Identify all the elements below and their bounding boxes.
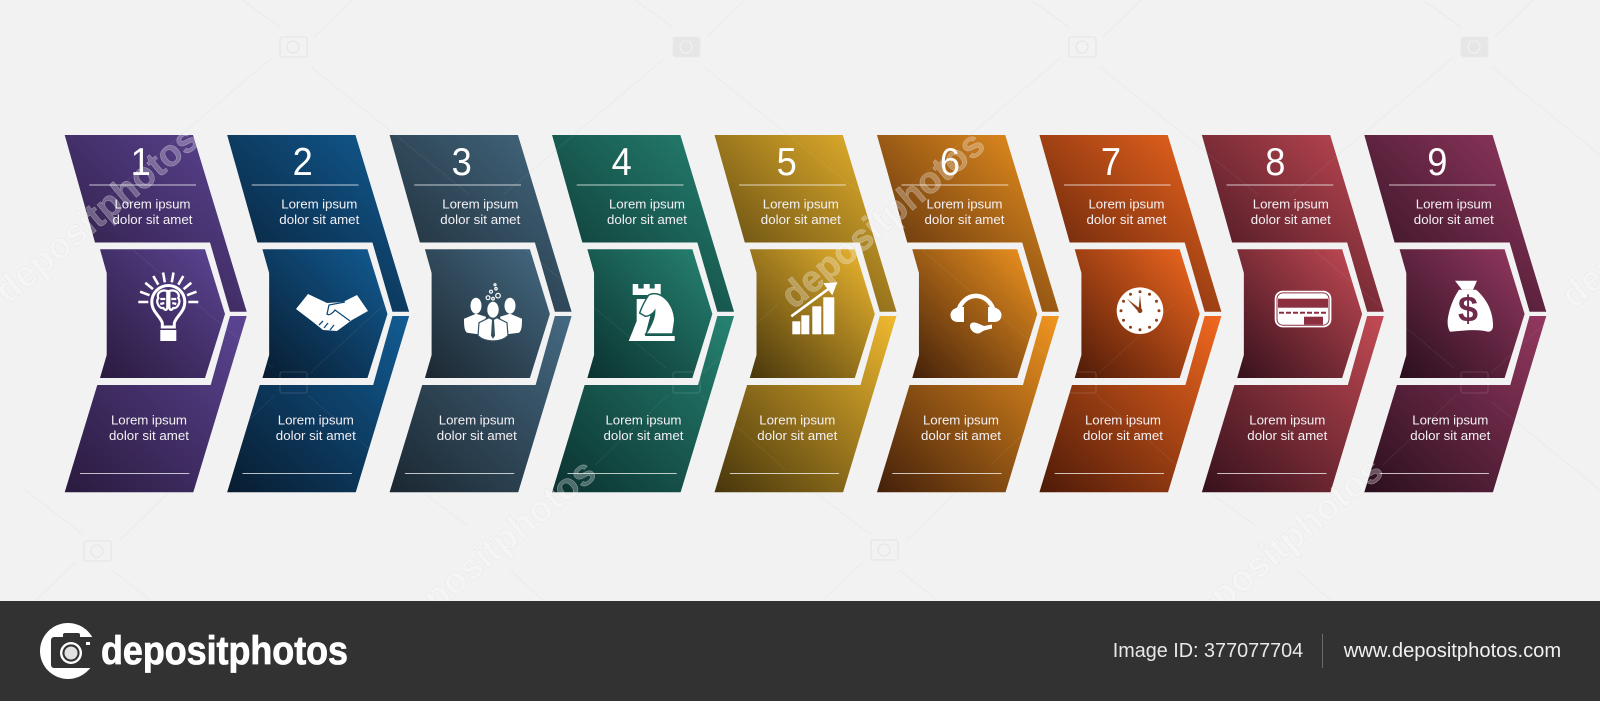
step 3 bottom text: dolor sit amet bbox=[437, 428, 517, 443]
step 9 bottom text: dolor sit amet bbox=[1410, 428, 1491, 443]
step 2 shapes bbox=[227, 135, 409, 492]
step 9 bottom text: Lorem ipsum bbox=[1412, 412, 1488, 427]
step 6 bottom text: Lorem ipsum bbox=[923, 412, 999, 427]
step 2 number: 2 bbox=[293, 140, 313, 183]
logo wordmark: depositphotos bbox=[101, 629, 348, 673]
step 8 number: 8 bbox=[1265, 140, 1285, 183]
step 1 number: 1 bbox=[131, 140, 151, 183]
step 6 top text: dolor sit amet bbox=[924, 212, 1005, 227]
watermark: depositphotos text marks: depositphotos bbox=[382, 451, 603, 646]
step 8 shapes bbox=[1202, 135, 1384, 492]
step 4 number: 4 bbox=[612, 140, 632, 183]
step 3 top text: Lorem ipsum bbox=[442, 196, 518, 211]
icon: money bag: $ bbox=[1458, 289, 1478, 330]
step 7 top text bbox=[1086, 196, 1167, 227]
step 6 bbox=[877, 135, 1059, 492]
step 1 bottom text: Lorem ipsum bbox=[111, 412, 187, 427]
step 1 top segment bbox=[65, 135, 247, 312]
step 9 bottom text bbox=[1410, 412, 1491, 443]
step 7 bottom text: dolor sit amet bbox=[1083, 428, 1163, 443]
step 2 top text bbox=[279, 196, 360, 227]
icon: handshake bbox=[296, 294, 368, 331]
step 2 bottom text: Lorem ipsum bbox=[278, 412, 354, 427]
step 6 bottom text bbox=[921, 412, 1001, 443]
step 7 bottom text: Lorem ipsum bbox=[1085, 412, 1161, 427]
icon: growth bar chart with arrow bbox=[791, 282, 837, 334]
step 2 bbox=[227, 135, 409, 492]
step 8 top text: dolor sit amet bbox=[1251, 212, 1331, 227]
step 9 shapes bbox=[1364, 135, 1546, 492]
step 5 top text: Lorem ipsum bbox=[763, 196, 839, 211]
step 9 top text: dolor sit amet bbox=[1414, 212, 1494, 227]
step 7 number: 7 bbox=[1101, 140, 1121, 183]
step 4 top text: Lorem ipsum bbox=[609, 196, 685, 211]
step 2 top text: Lorem ipsum bbox=[281, 196, 357, 211]
watermark: depositphotos text marks: depositphotos bbox=[773, 123, 992, 316]
step 4 top text: dolor sit amet bbox=[607, 212, 687, 227]
icon: camera logo bbox=[40, 623, 96, 679]
icon: clock bbox=[1117, 287, 1163, 334]
website url: www.depositphotos.com bbox=[1343, 640, 1561, 662]
step 1 top text: dolor sit amet bbox=[112, 212, 193, 227]
step 7 shapes bbox=[1039, 135, 1221, 492]
icon: team with gears bbox=[464, 284, 522, 341]
step 9 bbox=[1364, 135, 1546, 492]
step 8 top text bbox=[1251, 196, 1331, 227]
step 9 number: 9 bbox=[1427, 140, 1447, 183]
step 1 bottom text bbox=[109, 412, 189, 443]
image id: Image ID: 377077704 bbox=[1113, 640, 1303, 662]
step 1 bottom text: dolor sit amet bbox=[109, 428, 189, 443]
icon: headset bbox=[950, 296, 1002, 334]
step 6 bottom text: dolor sit amet bbox=[921, 428, 1001, 443]
watermark: depositphotos text marks bbox=[0, 118, 1600, 646]
step 7 top text: Lorem ipsum bbox=[1088, 196, 1164, 211]
step 5 top text bbox=[761, 196, 841, 227]
step 3 number: 3 bbox=[452, 140, 472, 183]
step 6 shapes bbox=[877, 135, 1059, 492]
step 8 bottom text bbox=[1247, 412, 1328, 443]
icon: chess rook and knight bbox=[629, 284, 675, 341]
step 4 bottom text bbox=[604, 412, 684, 443]
step 3 shapes bbox=[390, 135, 572, 492]
step 1 center arrow bbox=[100, 249, 225, 378]
step 3 bottom text: Lorem ipsum bbox=[439, 412, 515, 427]
step 1 top text: Lorem ipsum bbox=[114, 196, 190, 211]
step 2 bottom text: dolor sit amet bbox=[276, 428, 356, 443]
icon: money bag bbox=[1448, 281, 1493, 332]
step 5 bottom text: Lorem ipsum bbox=[759, 412, 835, 427]
step 8 bottom text: dolor sit amet bbox=[1247, 428, 1328, 443]
step 7 bbox=[1039, 135, 1221, 492]
step 5 bottom text bbox=[757, 412, 838, 443]
step 3 bbox=[390, 135, 572, 492]
step 5 bbox=[714, 135, 896, 492]
step 5 bottom text: dolor sit amet bbox=[757, 428, 838, 443]
icon: credit card bbox=[1275, 291, 1331, 327]
step 5 top text: dolor sit amet bbox=[761, 212, 841, 227]
step 3 bottom text bbox=[437, 412, 517, 443]
step 4 bottom text: dolor sit amet bbox=[604, 428, 684, 443]
step 8 top text: Lorem ipsum bbox=[1253, 196, 1329, 211]
step 1 top text bbox=[112, 196, 193, 227]
step 4 top text bbox=[607, 196, 687, 227]
step 6 top text: Lorem ipsum bbox=[926, 196, 1002, 211]
step 3 top text: dolor sit amet bbox=[440, 212, 521, 227]
step 6 number: 6 bbox=[940, 140, 960, 183]
watermark lines and camera marks over the arrows bbox=[110, 57, 1600, 470]
step 9 top text bbox=[1414, 196, 1494, 227]
step 8 bbox=[1202, 135, 1384, 492]
footer bar bbox=[0, 601, 1600, 701]
step 9 top text: Lorem ipsum bbox=[1416, 196, 1492, 211]
step 4 bottom text: Lorem ipsum bbox=[606, 412, 682, 427]
step 8 bottom text: Lorem ipsum bbox=[1249, 412, 1325, 427]
watermark: depositphotos text marks: depositphotos bbox=[1169, 449, 1390, 644]
step 2 bottom text bbox=[276, 412, 356, 443]
step 6 top text bbox=[924, 196, 1005, 227]
step 5 shapes bbox=[714, 135, 896, 492]
step 3 top text bbox=[440, 196, 521, 227]
step 1 bottom segment bbox=[65, 316, 247, 492]
step 7 bottom text bbox=[1083, 412, 1163, 443]
step 2 top text: dolor sit amet bbox=[279, 212, 360, 227]
step 7 top text: dolor sit amet bbox=[1086, 212, 1167, 227]
step 4 shapes bbox=[552, 135, 734, 492]
step 4 bbox=[552, 135, 734, 492]
icon: light bulb with brain bbox=[138, 272, 198, 341]
step 1 bbox=[65, 135, 247, 492]
step 5 number: 5 bbox=[777, 140, 797, 183]
